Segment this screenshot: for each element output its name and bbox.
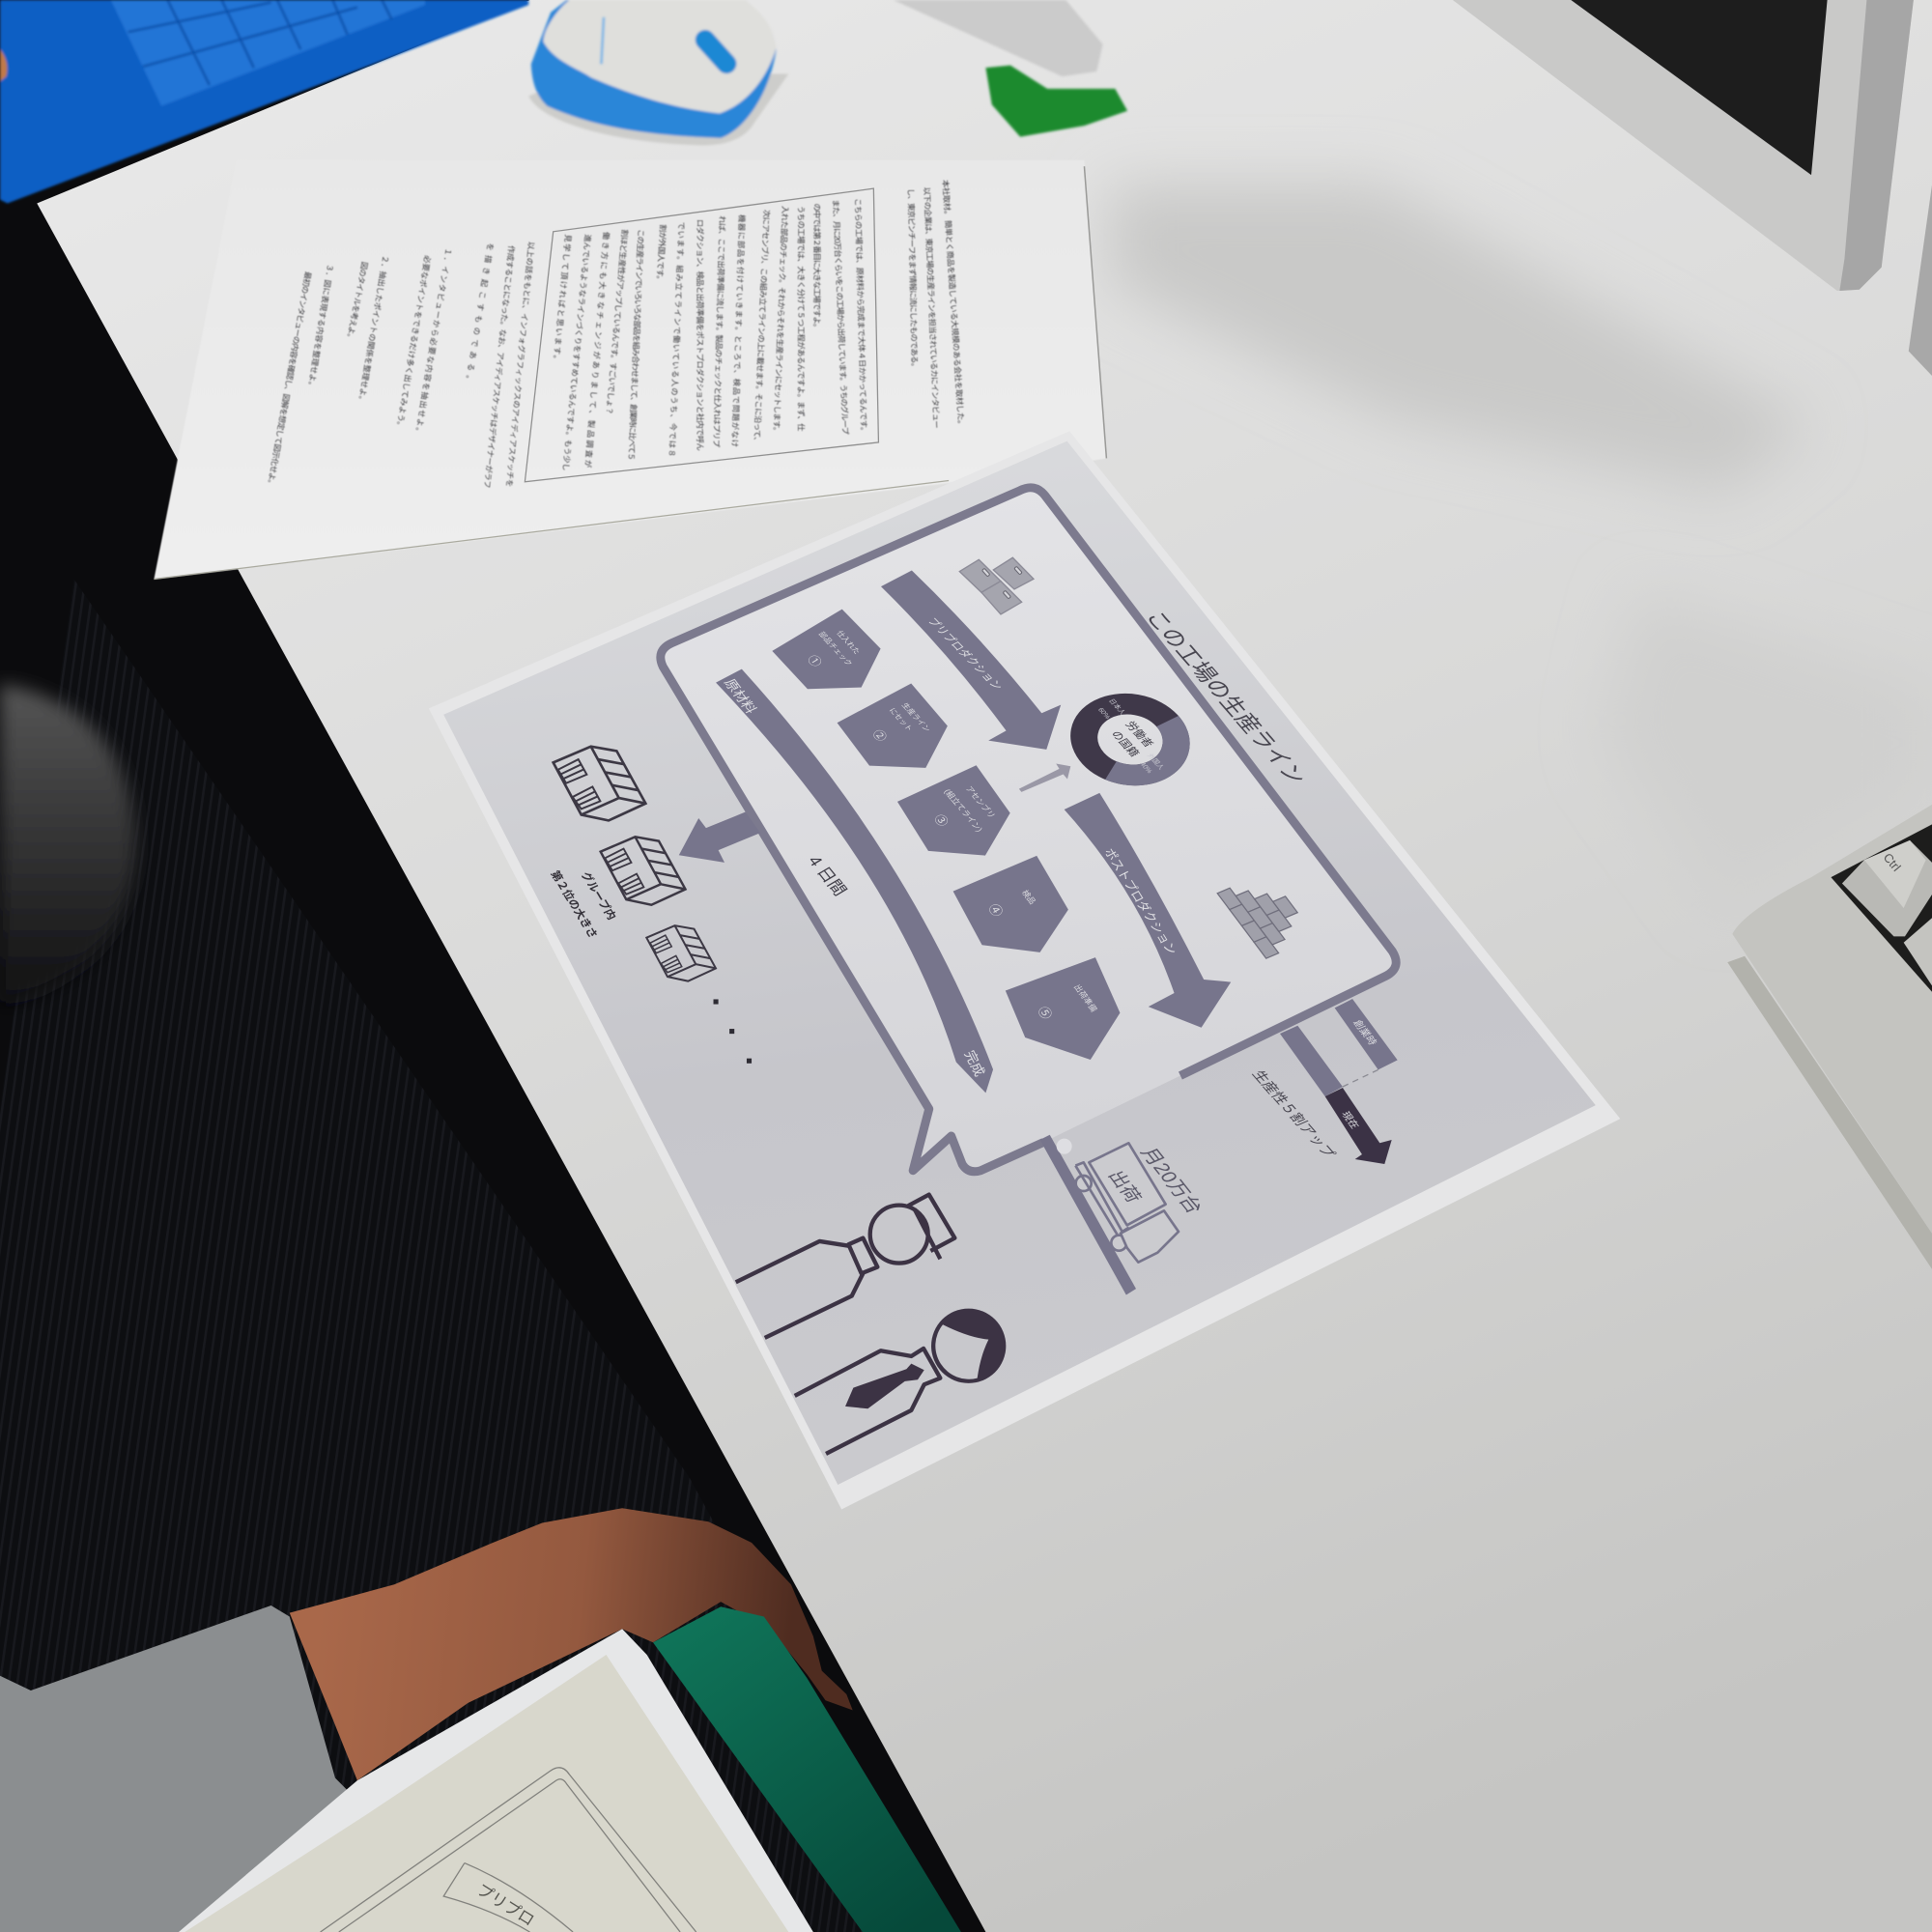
manuscript text lines: 見学して頂ければと思います。 — [552, 234, 573, 363]
manuscript text lines: の中では第２番目に大きな工場ですよ。 — [812, 203, 822, 331]
process step 5 — [1006, 957, 1120, 1060]
process step 3: ③ — [931, 811, 952, 829]
paper: interview manuscript — [154, 160, 1106, 579]
green folder — [653, 1606, 961, 1932]
factory caption: グループ内 — [579, 869, 619, 922]
manuscript text lines: 必要なポイントをできるだけ多く出してみよう。 — [395, 255, 433, 430]
manuscript text lines: 作成することになった。なお、アイディアスケッチはデザイナーがラフ — [482, 245, 517, 489]
productivity caption: 生産性５割アップ — [1248, 1068, 1338, 1160]
infographic printed sheet — [429, 431, 1620, 1509]
manuscript text lines: ロダクション、検品と出荷準備をポストプロダクションと社内で呼ん — [696, 219, 705, 451]
manuscript text lines: 入れた部品のチェック。それからそれを生産ラインにセットします。 — [772, 206, 790, 435]
manuscript text lines: うちの工場では、大きく分けて５つ工程があるんですよ。まず、仕 — [797, 206, 807, 431]
process step 2: ② — [869, 727, 891, 744]
computer monitor — [1453, 0, 1932, 376]
manuscript text lines: 働き方にも大きなチェンジがありまして、製品調査が — [583, 232, 611, 469]
clear file with sketch paper — [179, 1629, 813, 1932]
process step 5: ⑤ — [1035, 1005, 1055, 1022]
pencil sketch — [321, 1768, 696, 1932]
grey knee in the dark background — [0, 684, 135, 1005]
arrow: post-production — [1065, 793, 1231, 1028]
factory caption: 第２位の大きさ — [548, 868, 601, 940]
process step 1: 仕入れた — [835, 629, 863, 656]
icon: manager with tie — [795, 1309, 1006, 1454]
process step 1 — [772, 610, 881, 689]
raw material curved band: 原材料 — [722, 676, 760, 716]
process step 5: 出荷準備 — [1072, 982, 1099, 1013]
person's hand — [290, 1508, 853, 1780]
manuscript text lines: 割ほど生産性がアップしているんです。すごいでしょ？ — [605, 229, 630, 415]
manuscript text lines — [266, 180, 966, 489]
dots ellipsis — [714, 999, 752, 1064]
donut chart: worker nationality: 日本人 — [1107, 697, 1128, 716]
manuscript text lines: 割が外国人です。 — [655, 224, 668, 284]
manuscript text lines: 以上の話をもとに、インフォグラフィックスのアイディアスケッチを — [504, 242, 536, 488]
manuscript text lines: ３．図に表現する内容を整理せよ。 — [306, 264, 335, 390]
arrow: pre-production: プリプロダクション — [924, 615, 1006, 692]
icon: stacked boxes top — [959, 557, 1034, 614]
donut chart: worker nationality — [1062, 687, 1196, 790]
donut chart: worker nationality: 労働者 — [1122, 719, 1156, 750]
four days label: 4 日間 — [805, 852, 851, 899]
computer mouse — [528, 0, 788, 146]
process step 3 — [897, 765, 1010, 856]
raw material curved band: 完成 — [961, 1048, 988, 1079]
shipping stem bar — [1040, 1135, 1136, 1295]
donut chart: worker nationality: 60% — [1096, 707, 1111, 720]
arrow: post-production: ポストプロダクション — [1101, 846, 1179, 957]
productivity bars: 現在 — [1339, 1110, 1361, 1130]
manuscript text lines: この生産ラインでいろいろな部品を組み合わせまして、創業時に比べて５ — [627, 229, 646, 461]
manuscript text lines: こちらの工場では、原材料から完成まで大体４日かかってるんです。 — [853, 198, 869, 435]
manuscript text lines: 本社取材。 簡単とく商品を製造している大規模のある会社を取材した。 — [941, 180, 966, 428]
green connector — [985, 66, 1127, 137]
arrow out of bubble to factories — [679, 812, 760, 863]
title: この工場の生産ライン — [1141, 608, 1311, 787]
icon: worker with cap — [736, 1195, 954, 1338]
icon: factory small — [646, 925, 716, 981]
manuscript text lines: し、東京ピンチーフをまず情報に流にしたものである。 — [906, 188, 920, 371]
raw material curved band — [716, 669, 993, 1093]
process step 1: ① — [805, 653, 825, 669]
icon: factory medium — [601, 837, 686, 905]
sheet paper — [429, 431, 1620, 1509]
icon: boxes pyramid — [1217, 872, 1316, 958]
donut chart: worker nationality: 40% — [1138, 761, 1153, 775]
small arrow to donut — [1019, 764, 1070, 792]
manuscript text lines: 図のタイトルを考えよ。 — [345, 261, 369, 342]
manuscript text lines: 機器に部品を付けていきます。ところで、検品で問題がなけ — [730, 214, 747, 447]
manuscript text lines: れば、ここで出荷準備に流します。製品のチェックと仕入れはプリプ — [712, 215, 727, 448]
person's sleeve — [0, 1605, 354, 1932]
mechanical keyboard with Ctrl key — [1727, 805, 1932, 1269]
process step 3: (組立てライン) — [942, 787, 985, 834]
donut chart: worker nationality: の国籍 — [1108, 728, 1143, 758]
printed background — [443, 441, 1596, 1485]
manuscript text lines: また、月に20万台くらいをこの工場から出荷しています。うちのグループ — [831, 199, 850, 436]
process step 4: 検品 — [1020, 889, 1038, 906]
blue tablet keyboard — [0, 0, 528, 203]
process step 2 — [838, 684, 948, 768]
manuscript text lines: 進んでいるようなラインづくりをすすめているんですよ。もう少し — [561, 234, 593, 471]
manuscript text lines: 最初のインタビューの内容を確認し、図解を想定して図示化せよ。 — [266, 270, 313, 489]
productivity bars — [1280, 999, 1398, 1164]
silver cable clip — [894, 0, 1103, 76]
speech bubble panel — [661, 488, 1396, 1172]
manuscript text lines: 次にアセンブリ、この組み立てラインの上に載せます。そこに沿って、 — [753, 210, 772, 445]
monthly output label: 月20万台 — [1136, 1145, 1207, 1216]
clear file with sketch paper: プリプロ — [473, 1880, 538, 1930]
process step 1: 部品チェック — [817, 630, 854, 668]
manuscript text lines: を描き起こすものである。 — [464, 242, 496, 384]
donut chart: worker nationality: 外国人 — [1146, 753, 1167, 771]
manuscript text lines: １．インタビューから必要な内容を抽出せよ。 — [413, 247, 454, 437]
truck label: 出荷 — [1103, 1168, 1146, 1206]
process step 2: にセット — [887, 706, 915, 733]
process step 4 — [953, 856, 1068, 952]
process step 3: アセンブリ — [964, 784, 997, 820]
mechanical keyboard with Ctrl key: Ctrl — [1881, 850, 1904, 874]
arrow: pre-production — [881, 571, 1061, 750]
process step 2: 生産ライン — [900, 701, 933, 733]
icon: factory large — [554, 747, 645, 820]
manuscript text lines: でいます。組み立てラインで働いている人のうち、今では８ — [668, 222, 687, 457]
manuscript text lines: 以下の企業は、東京工場の生産ラインを担当されているカにインタビュー — [923, 187, 942, 429]
icon: delivery truck — [1057, 1139, 1179, 1263]
manuscript text lines: ２．抽出したポイントの関係を整理せよ。 — [356, 255, 391, 405]
productivity bars: 創業時 — [1350, 1018, 1379, 1047]
process step 4: ④ — [985, 901, 1006, 919]
